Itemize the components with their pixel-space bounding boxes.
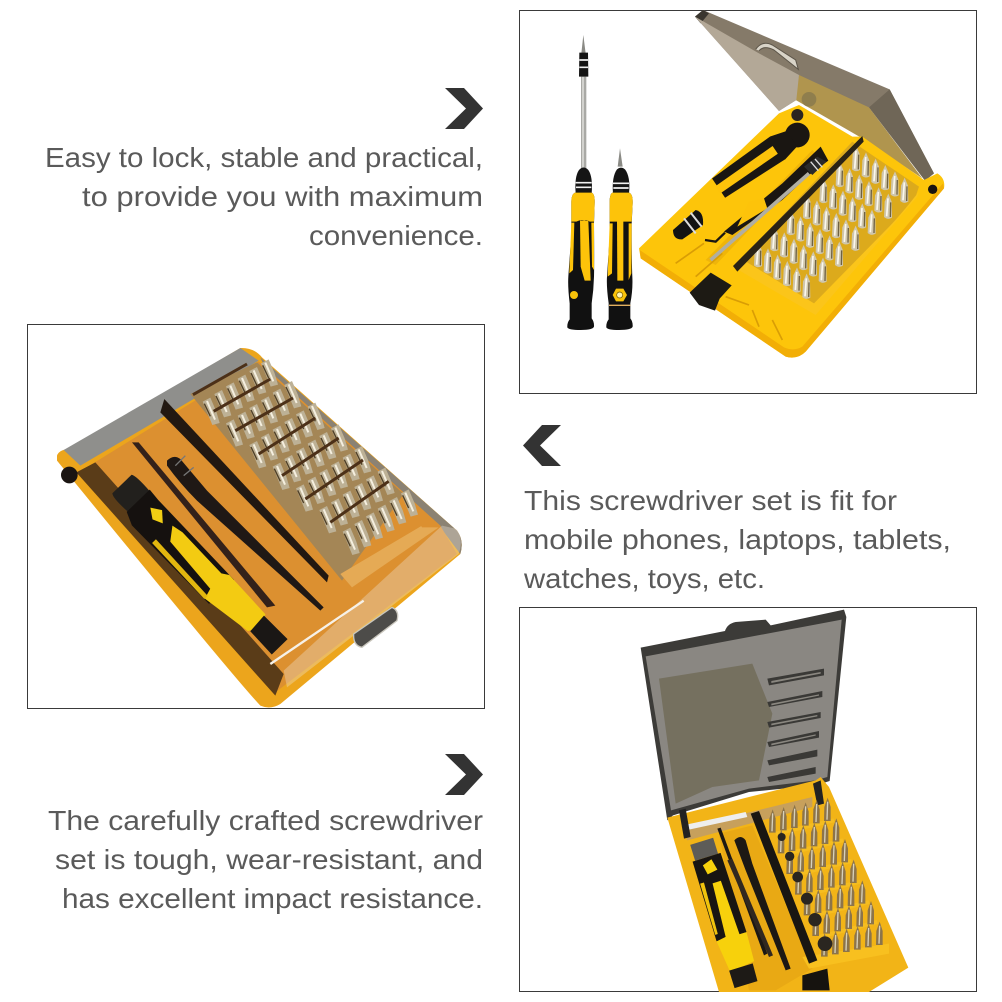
tools <box>687 828 830 990</box>
open lid <box>695 10 934 181</box>
text block: durability: set is tough, wear-resistant, and <box>55 844 483 875</box>
text block: compatible devices: mobile phones, laptops, tablets, <box>524 524 951 555</box>
tools in closed box <box>106 442 324 662</box>
text block: durability: The carefully crafted screwdriver <box>48 805 483 836</box>
bit grid <box>754 146 908 299</box>
closed box body <box>57 348 462 707</box>
panel: bottom-right photo of open set from above <box>520 608 976 992</box>
chevron: left arrow <box>523 425 561 466</box>
row ledges <box>776 820 877 937</box>
bit tray divider <box>733 136 864 272</box>
yellow tray <box>667 777 908 992</box>
text block: compatible devices <box>523 485 951 594</box>
transparent lid glare <box>270 526 461 687</box>
text block: compatible devices: watches, toys, etc. <box>523 563 765 594</box>
bit rows <box>203 359 418 555</box>
tray latch <box>690 273 732 311</box>
row dividers <box>193 364 389 522</box>
text block: lock feature: to provide you with maximum <box>82 181 483 212</box>
text block: compatible devices: This screwdriver set is fit for <box>524 485 897 516</box>
divider rail <box>751 811 817 964</box>
screwdriver: long shaft <box>567 35 595 330</box>
chevron: right arrow 1 <box>445 88 483 129</box>
yellow tray <box>639 105 944 358</box>
chevron: right arrow 2 <box>445 754 483 795</box>
tray handle and tools <box>673 109 828 260</box>
tray well ribs <box>676 243 782 340</box>
text block: lock feature <box>45 142 483 251</box>
text block: durability <box>48 805 483 914</box>
bit rows <box>769 798 883 957</box>
closed box latch <box>354 607 398 647</box>
text block: lock feature: Easy to lock, stable and practical, <box>45 142 483 173</box>
panel: top-right photo of open screwdriver set <box>520 10 976 394</box>
text block: durability: has excellent impact resistance. <box>62 883 483 914</box>
screwdriver: short shaft <box>606 148 633 330</box>
long divider <box>160 399 329 582</box>
text block: lock feature: convenience. <box>309 220 483 251</box>
lid <box>641 610 846 820</box>
panel: left photo of closed screwdriver set <box>28 324 484 708</box>
